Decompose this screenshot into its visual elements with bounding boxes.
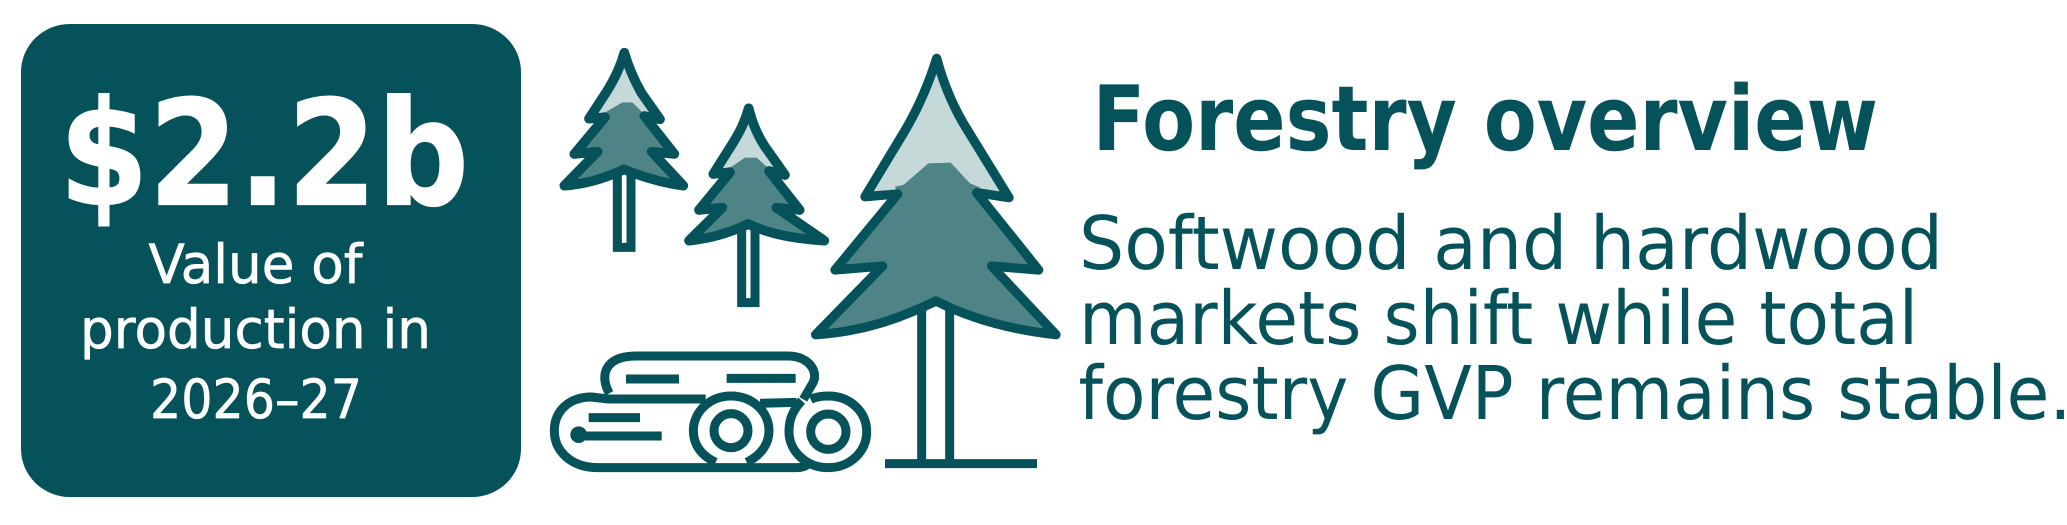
- panel caption: production in: [80, 298, 431, 361]
- panel caption: 2026–27: [150, 368, 362, 431]
- icon: small left tree: [564, 53, 683, 247]
- heading: Forestry overview: [1092, 67, 1878, 172]
- text block: summary: Softwood and hardwood: [1079, 201, 1943, 287]
- icon: log pile: [554, 356, 867, 468]
- panel: value of production: [21, 24, 521, 497]
- icon: small middle tree: [689, 108, 824, 303]
- icon: large tree: [816, 58, 1056, 464]
- panel caption: Value of: [148, 233, 364, 296]
- text block: summary: [1078, 201, 2067, 437]
- icon: trees and logs: [554, 53, 1056, 468]
- big number: $2.2b: [59, 70, 469, 240]
- text block: summary: markets shift while total: [1079, 276, 1918, 362]
- panel background: [21, 24, 521, 497]
- panel caption: [80, 233, 431, 431]
